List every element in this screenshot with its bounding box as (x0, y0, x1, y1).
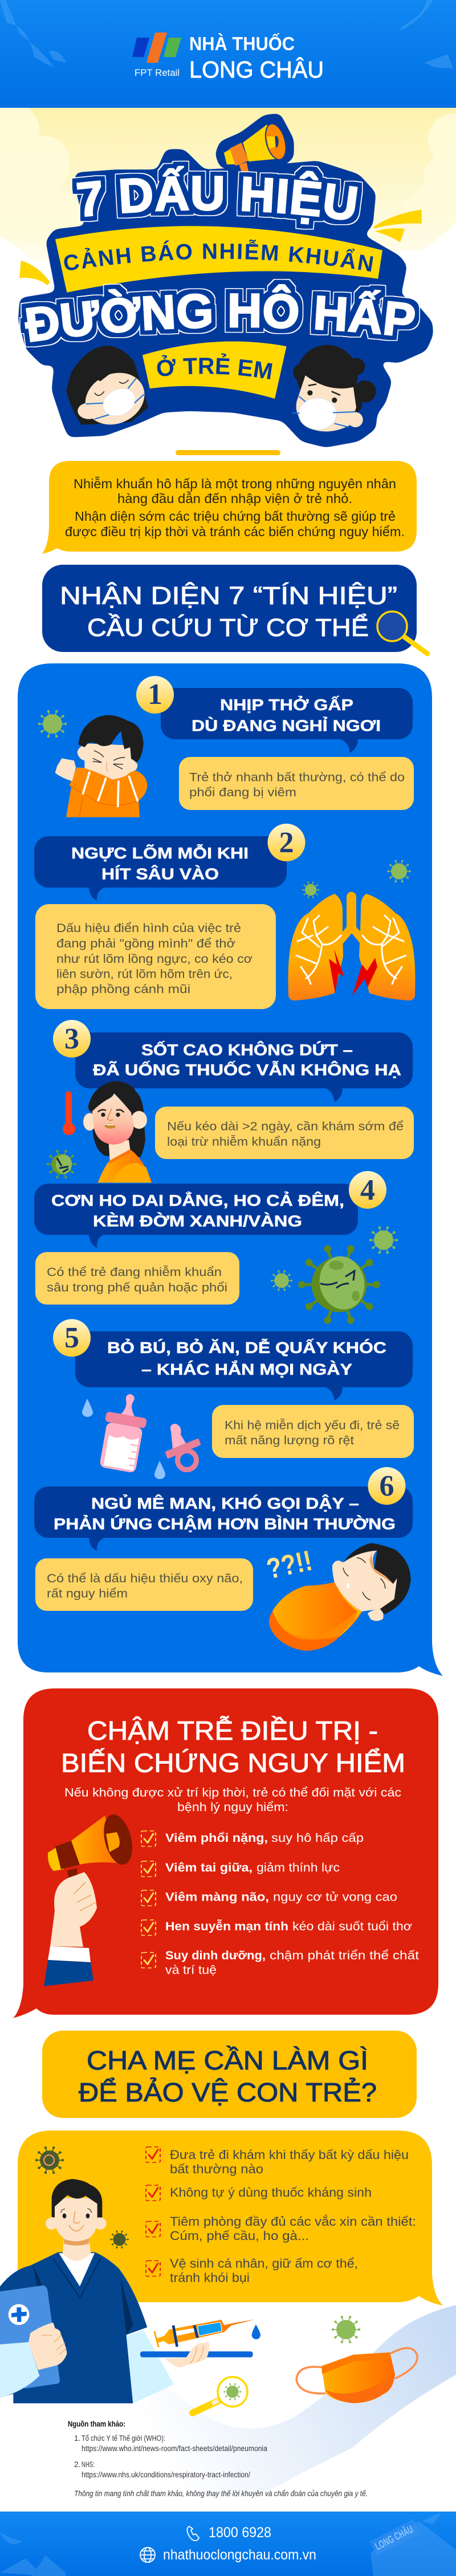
complications heading: BIẾN CHỨNG NGUY HIỂM (61, 1748, 405, 1777)
reference 2: https://www.nhs.uk/conditions/respiratory-tract-infection/ (82, 2470, 250, 2479)
complications intro: Nếu không được xử trí kịp thời, trẻ có thể đối mặt với các (64, 1787, 401, 1799)
icon: phone (187, 2526, 199, 2541)
icon: viruses (303, 861, 410, 897)
number badge 5: 5 (64, 1322, 79, 1354)
sign 3 heading: ĐÃ UỐNG THUỐC VẪN KHÔNG HẠ (93, 1060, 401, 1079)
sign 2 heading: NGỰC LÕM MỖI KHI (71, 844, 249, 862)
sign 1 description: Trẻ thở nhanh bất thường, có thể do (189, 771, 405, 784)
number badge 4 (349, 1171, 386, 1209)
item: khang sinh: Không tự ý dùng thuốc kháng sinh (170, 2185, 372, 2200)
intro speech bubble (42, 461, 417, 554)
complications heading (61, 1716, 405, 1777)
number badge 2 (268, 824, 306, 861)
icon: megaphone (217, 115, 292, 172)
reference 1: Tổ chức Y tế Thế giới (WHO): (82, 2434, 165, 2443)
sign 6 (34, 1467, 413, 1651)
sign 4 heading (51, 1191, 344, 1230)
item: tiem phong: Tiêm phòng đầy đủ các vắc xin cần thiết: (170, 2214, 416, 2229)
references (68, 2419, 368, 2498)
illustration: hand with megaphone (44, 1812, 137, 1986)
sign 6 description: rất nguy hiểm (47, 1587, 128, 1601)
parents heading text: CHA MẸ CẦN LÀM GÌ (87, 2046, 368, 2075)
item: suy dinh duong: và trí tuệ (165, 1963, 217, 1977)
hero background with clouds (0, 108, 456, 319)
reference 1: https://www.who.int/news-room/fact-sheets/detail/pneumonia (82, 2444, 267, 2453)
item: ve sinh: tránh khói bụi (170, 2270, 250, 2285)
item: hen suyen (141, 1919, 412, 1935)
item: viem phoi: Viêm phổi nặng, (165, 1832, 268, 1845)
heading text: NHẬN DIỆN 7 “TÍN HIỆU” (60, 582, 397, 610)
disclaimer: Thông tin mang tính chất tham khảo, không thay thế lời khuyên và chẩn đoán của chuyên gia y tế. (74, 2489, 368, 2498)
icon: small viruses (272, 1228, 397, 1290)
title: 7 dau hieu: 7 DẤU HIỆU (71, 161, 363, 230)
sign 2 description: đang phải "gồng mình" để thở (56, 937, 235, 950)
item: ve sinh: Vệ sinh cá nhân, giữ ấm cơ thể, (170, 2257, 358, 2270)
parents heading text: ĐỂ BẢO VỆ CON TRẺ? (79, 2077, 377, 2107)
intro text: hàng đầu dẫn đến nhập viện ở trẻ nhỏ. (117, 491, 352, 506)
sign 4 description (35, 1252, 239, 1305)
sign 2 heading: HÍT SÂU VÀO (101, 865, 219, 883)
intro text: được điều trị kịp thời và tránh các biến chứng nguy hiểm. (65, 524, 405, 539)
header band (0, 0, 456, 108)
icon: globe (140, 2547, 155, 2562)
icon: angry virus (48, 1151, 75, 1177)
sign 1 description (179, 757, 414, 810)
intro text (65, 476, 405, 539)
logo: Nhà thuốc Long Châu: LONG CHÂU (189, 56, 324, 83)
sign 6 description: Có thể là dấu hiệu thiếu oxy não, (47, 1572, 243, 1585)
parents heading text (79, 2046, 377, 2107)
icon: magnifier with virus (193, 2377, 247, 2413)
panel: complications (13, 1688, 438, 2018)
complications intro: bệnh lý nguy hiểm: (177, 1801, 288, 1814)
sign 3 description (155, 1107, 414, 1159)
heading panel: nhan dien (42, 565, 427, 654)
sign 5 heading: BỎ BÚ, BỎ ĂN, DỄ QUẤY KHÓC (107, 1338, 386, 1356)
logo: FPT Retail: FPT Retail (135, 67, 180, 78)
sign 1 heading: DÙ ĐANG NGHỈ NGƠI (192, 716, 381, 735)
sign 1 (39, 676, 414, 817)
number badge 6 (368, 1467, 406, 1505)
heading text: CẦU CỨU TỪ CƠ THỂ (87, 613, 369, 642)
icon: dark viruses (36, 2148, 128, 2247)
item: tiem phong (146, 2214, 416, 2243)
sign 6 heading (54, 1494, 396, 1533)
item: suy dinh duong: Suy dinh dưỡng, (165, 1949, 266, 1962)
sign 2 (34, 824, 415, 1009)
sign 5 description (212, 1405, 414, 1458)
icon: virus (39, 711, 66, 736)
number badge 1: 1 (148, 678, 162, 711)
icon: green virus (333, 2317, 359, 2342)
sign 3 heading: SỐT CAO KHÔNG DỨT – (141, 1040, 353, 1059)
sign 3 (48, 1020, 414, 1182)
item: suy dinh duong (141, 1949, 419, 1977)
reference 1 (74, 2434, 267, 2453)
intro text: Nhiễm khuẩn hô hấp là một trong những nguyên nhân (74, 476, 396, 491)
sign 1 heading (192, 695, 381, 735)
item: viem tai giua: Viêm tai giữa, (165, 1861, 253, 1874)
complications heading: CHẬM TRỄ ĐIỀU TRỊ - (87, 1716, 378, 1745)
swoosh background (114, 2305, 456, 2498)
illustration: pacifier (166, 1424, 199, 1469)
sign 6 heading: NGỦ MÊ MAN, KHÓ GỌI DẬY – (91, 1494, 359, 1512)
icon: drops (82, 1399, 165, 1479)
sign 4 heading: CƠN HO DAI DẲNG, HO CẢ ĐÊM, (51, 1191, 344, 1209)
syringe (154, 2319, 260, 2347)
sign 4 heading: KÈM ĐỜM XANH/VÀNG (93, 1212, 302, 1230)
question marks: ??!! (264, 1544, 315, 1585)
banner: o tre em (142, 341, 286, 399)
item: di kham: bất thường nào (170, 2162, 263, 2176)
sign 6 heading: PHẢN ỨNG CHẬM HƠN BÌNH THƯỜNG (54, 1514, 396, 1533)
reference 2: NHS: (82, 2460, 95, 2469)
item: tiem phong: Cúm, phế cầu, ho gà... (170, 2229, 309, 2243)
sign 1 heading: NHỊP THỞ GẤP (220, 695, 353, 714)
sign 3 heading (93, 1040, 401, 1079)
number badge 3 (53, 1020, 91, 1058)
illustration: big angry virus (302, 1249, 377, 1320)
sign 6 description (35, 1558, 253, 1611)
item: di kham (146, 2147, 409, 2176)
sign 2 description: Dấu hiệu điển hình của việc trẻ (56, 922, 241, 935)
sign 5 description: Khi hệ miễn dịch yếu đi, trẻ sẽ (225, 1419, 400, 1432)
illustration: baby bottle (97, 1391, 150, 1473)
item: viem mang nao: Viêm màng não, (165, 1890, 269, 1904)
item: viem mang nao (141, 1890, 397, 1906)
sign 5 (53, 1319, 414, 1479)
item: di kham: Đưa trẻ đi khám khi thấy bất kỳ dấu hiệu (170, 2148, 409, 2162)
item: viem tai giua (141, 1861, 340, 1877)
heading panel: parents (42, 2031, 417, 2118)
sign 3 description: loại trừ nhiễm khuẩn nặng (167, 1135, 321, 1149)
sign 4 description: sâu trong phế quản hoặc phổi (47, 1281, 227, 1294)
item: ve sinh (146, 2257, 358, 2285)
illustration: coughing child (55, 715, 147, 817)
sign 2 description: liên sườn, rút lõm hõm trên ức, (56, 967, 233, 981)
number badge 1 (136, 676, 174, 714)
reference 2 (74, 2460, 250, 2479)
item: hen suyen: kéo dài suốt tuổi thơ (292, 1920, 412, 1933)
checklist: parents (146, 2147, 416, 2285)
panel: what parents should do (18, 2131, 443, 2306)
item: suy dinh duong: chậm phát triển thể chất (270, 1949, 419, 1962)
item: viem phoi (141, 1831, 364, 1846)
icon: magnifier (377, 611, 427, 654)
intro text: Nhận diện sớm các triệu chứng bất thường sẽ giúp trẻ (75, 509, 396, 524)
number badge 3: 3 (64, 1023, 79, 1055)
reference 2: 2. (74, 2460, 80, 2469)
sign 2 description (35, 904, 276, 1009)
references title: Nguồn tham khảo: (68, 2419, 125, 2428)
complications intro (64, 1787, 401, 1814)
illustration: girl with fever (83, 1081, 152, 1182)
item: hen suyen: Hen suyễn mạn tính (165, 1919, 288, 1933)
phone number: 1800 6928 (209, 2525, 271, 2541)
sign 4 (34, 1171, 397, 1320)
banner: canh bao: CẢNH BÁO NHIỄM KHUẨN (64, 240, 373, 272)
reference 1: 1. (74, 2434, 80, 2443)
illustration: doctor (0, 2179, 260, 2403)
website: nhathuoclongchau.com.vn (163, 2547, 316, 2563)
divider bar (176, 450, 280, 455)
title lockup (18, 114, 433, 447)
number badge 2: 2 (279, 827, 294, 859)
number badge 5 (53, 1319, 91, 1356)
logo: FPT Retail (132, 33, 181, 78)
footer (0, 2512, 456, 2576)
title: duong ho hap: ĐƯỜNG HÔ HẤP (19, 279, 420, 347)
illustration: boy with mask (292, 345, 376, 432)
sign 5 heading (107, 1338, 386, 1378)
illustration: girl with mask (66, 346, 153, 434)
logo: Nhà thuốc Long Châu (189, 33, 324, 83)
sign 5 heading: – KHÁC HẮN MỌI NGÀY (141, 1360, 352, 1378)
heading text (60, 582, 397, 642)
item: viem mang nao: nguy cơ tử vong cao (273, 1890, 397, 1904)
storefront sign (369, 2519, 421, 2555)
sign 2 description: như rút lõm lồng ngực, co kéo cơ (56, 953, 253, 966)
illustration: orange mask (296, 2348, 417, 2403)
sign 4 description: Có thể trẻ đang nhiễm khuẩn (47, 1266, 222, 1279)
illustration: lungs (288, 892, 415, 1001)
sign 1 description: phổi đang bị viêm (189, 786, 296, 799)
sign 2 description: phập phồng cánh mũi (56, 983, 190, 996)
number badge 4: 4 (360, 1174, 375, 1206)
banner: canh bao (55, 226, 382, 293)
sign 5 description: mất năng lượng rõ rệt (225, 1434, 354, 1447)
illustration: sleeping baby (269, 1543, 411, 1651)
logo: Nhà thuốc Long Châu: NHÀ THUỐC (189, 33, 295, 54)
item: viem phoi: suy hô hấp cấp (271, 1832, 364, 1845)
accent strokes (19, 209, 422, 285)
icon: thermometer (63, 1091, 75, 1135)
banner: o tre em: Ở TRẺ EM (157, 354, 272, 380)
panel: 7 signs (18, 663, 443, 1676)
sign 3 description: Nếu kéo dài >2 ngày, cần khám sớm để (167, 1120, 404, 1133)
checklist: complications (141, 1831, 419, 1977)
clipboard (0, 2286, 60, 2388)
sign 2 heading (71, 844, 249, 883)
item: viem tai giua: giảm thính lực (256, 1861, 340, 1874)
number badge 6: 6 (380, 1470, 394, 1502)
storefront sign: LONG CHÂU (373, 2523, 415, 2553)
